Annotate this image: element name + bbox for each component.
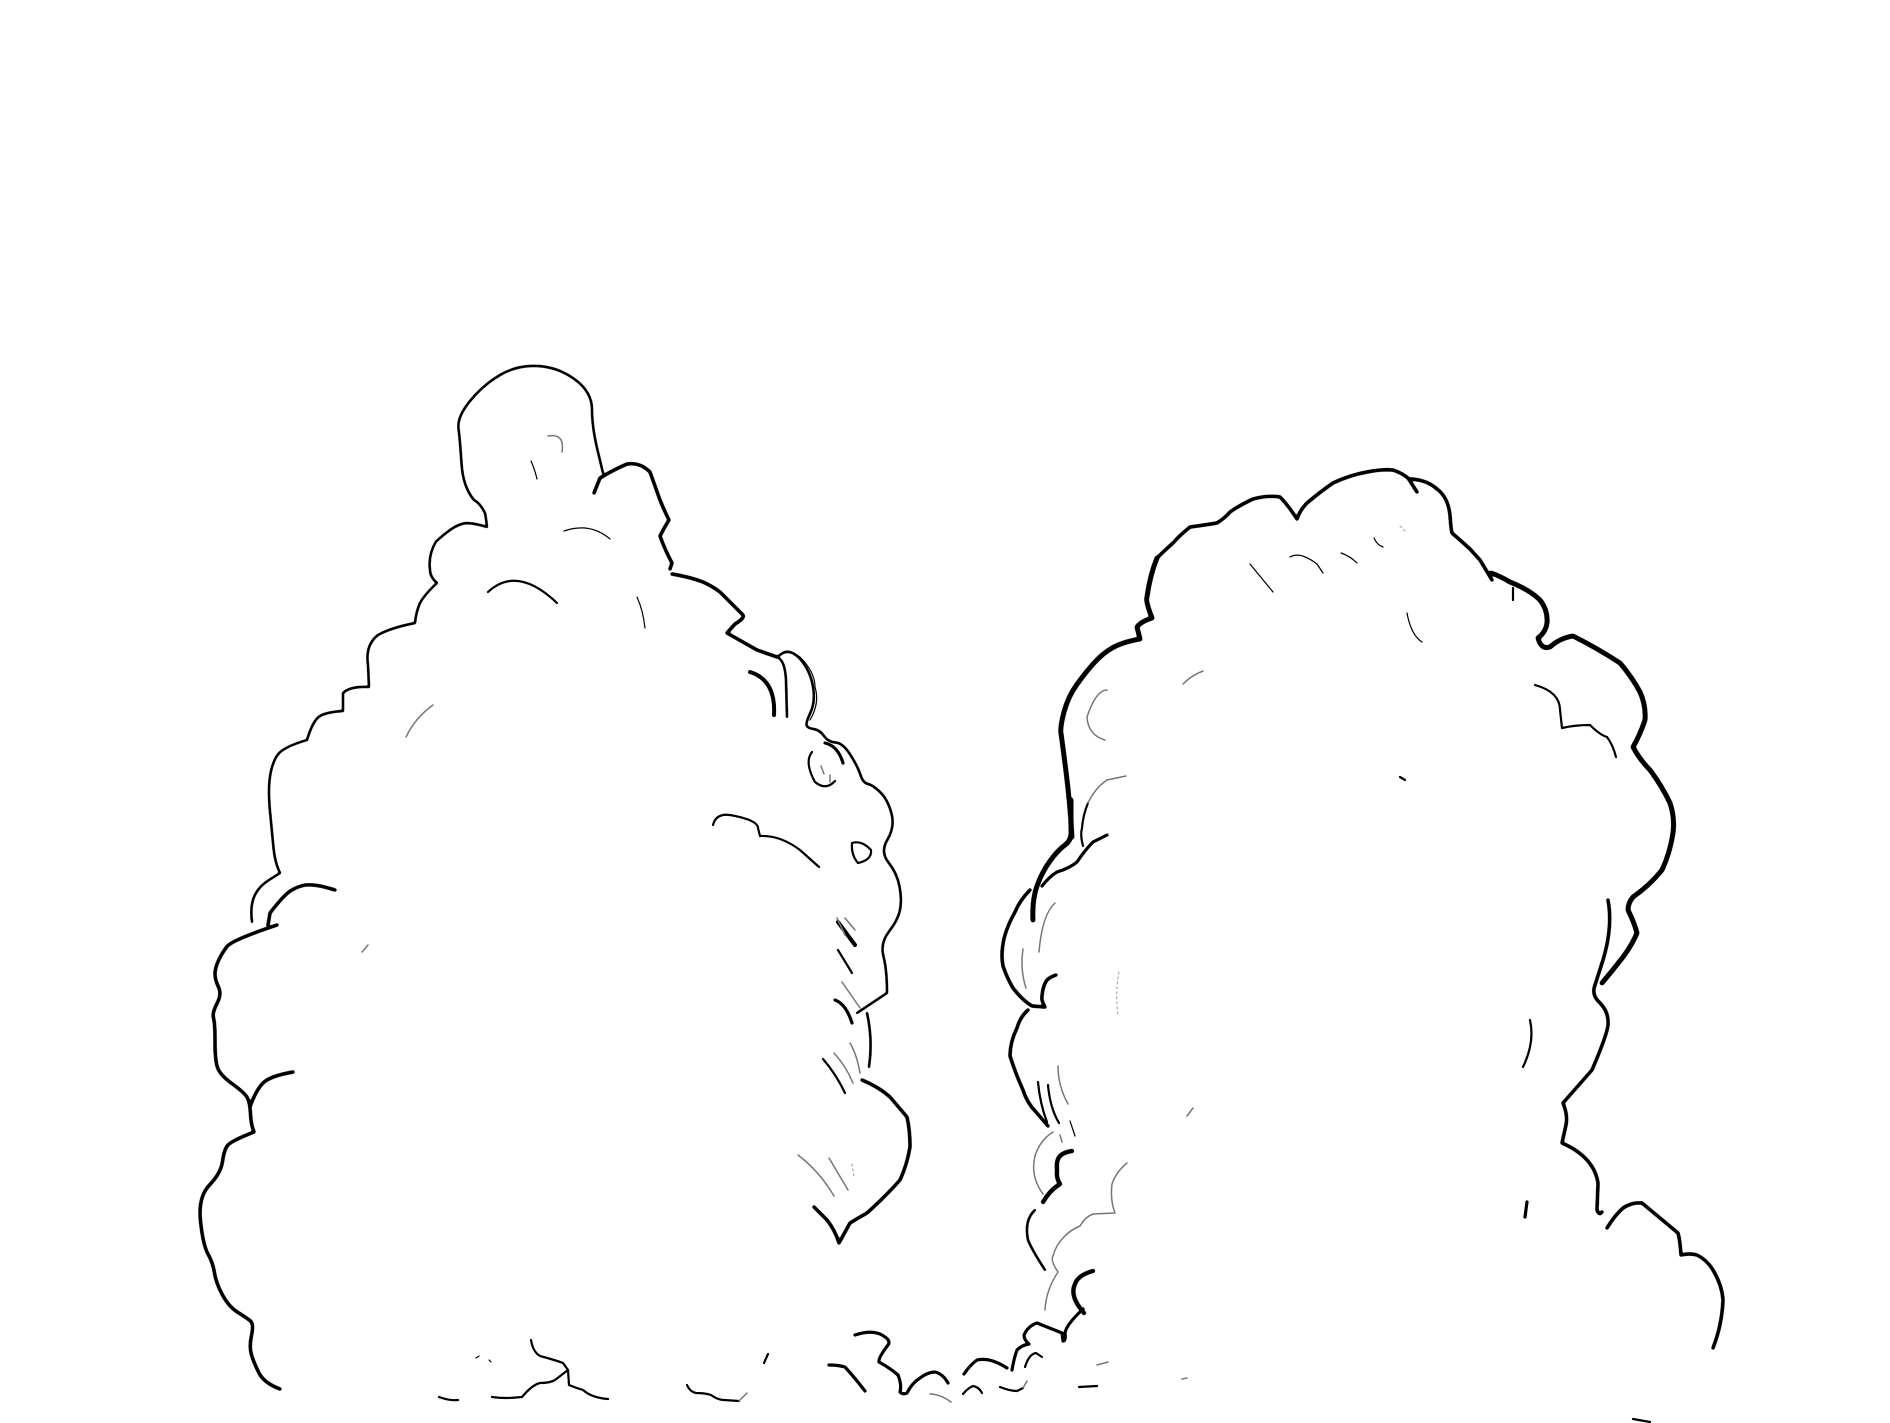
right cloud interior details bbox=[1022, 526, 1650, 1422]
left cloud interior details bbox=[362, 436, 871, 1196]
left cloud base strokes bbox=[439, 1340, 768, 1401]
left cloud bbox=[200, 366, 910, 1401]
right cloud bbox=[1002, 470, 1723, 1422]
left cloud outline bbox=[200, 366, 910, 1389]
right cloud outline bbox=[1002, 470, 1723, 1348]
junction strokes between clouds bbox=[829, 1309, 1108, 1402]
